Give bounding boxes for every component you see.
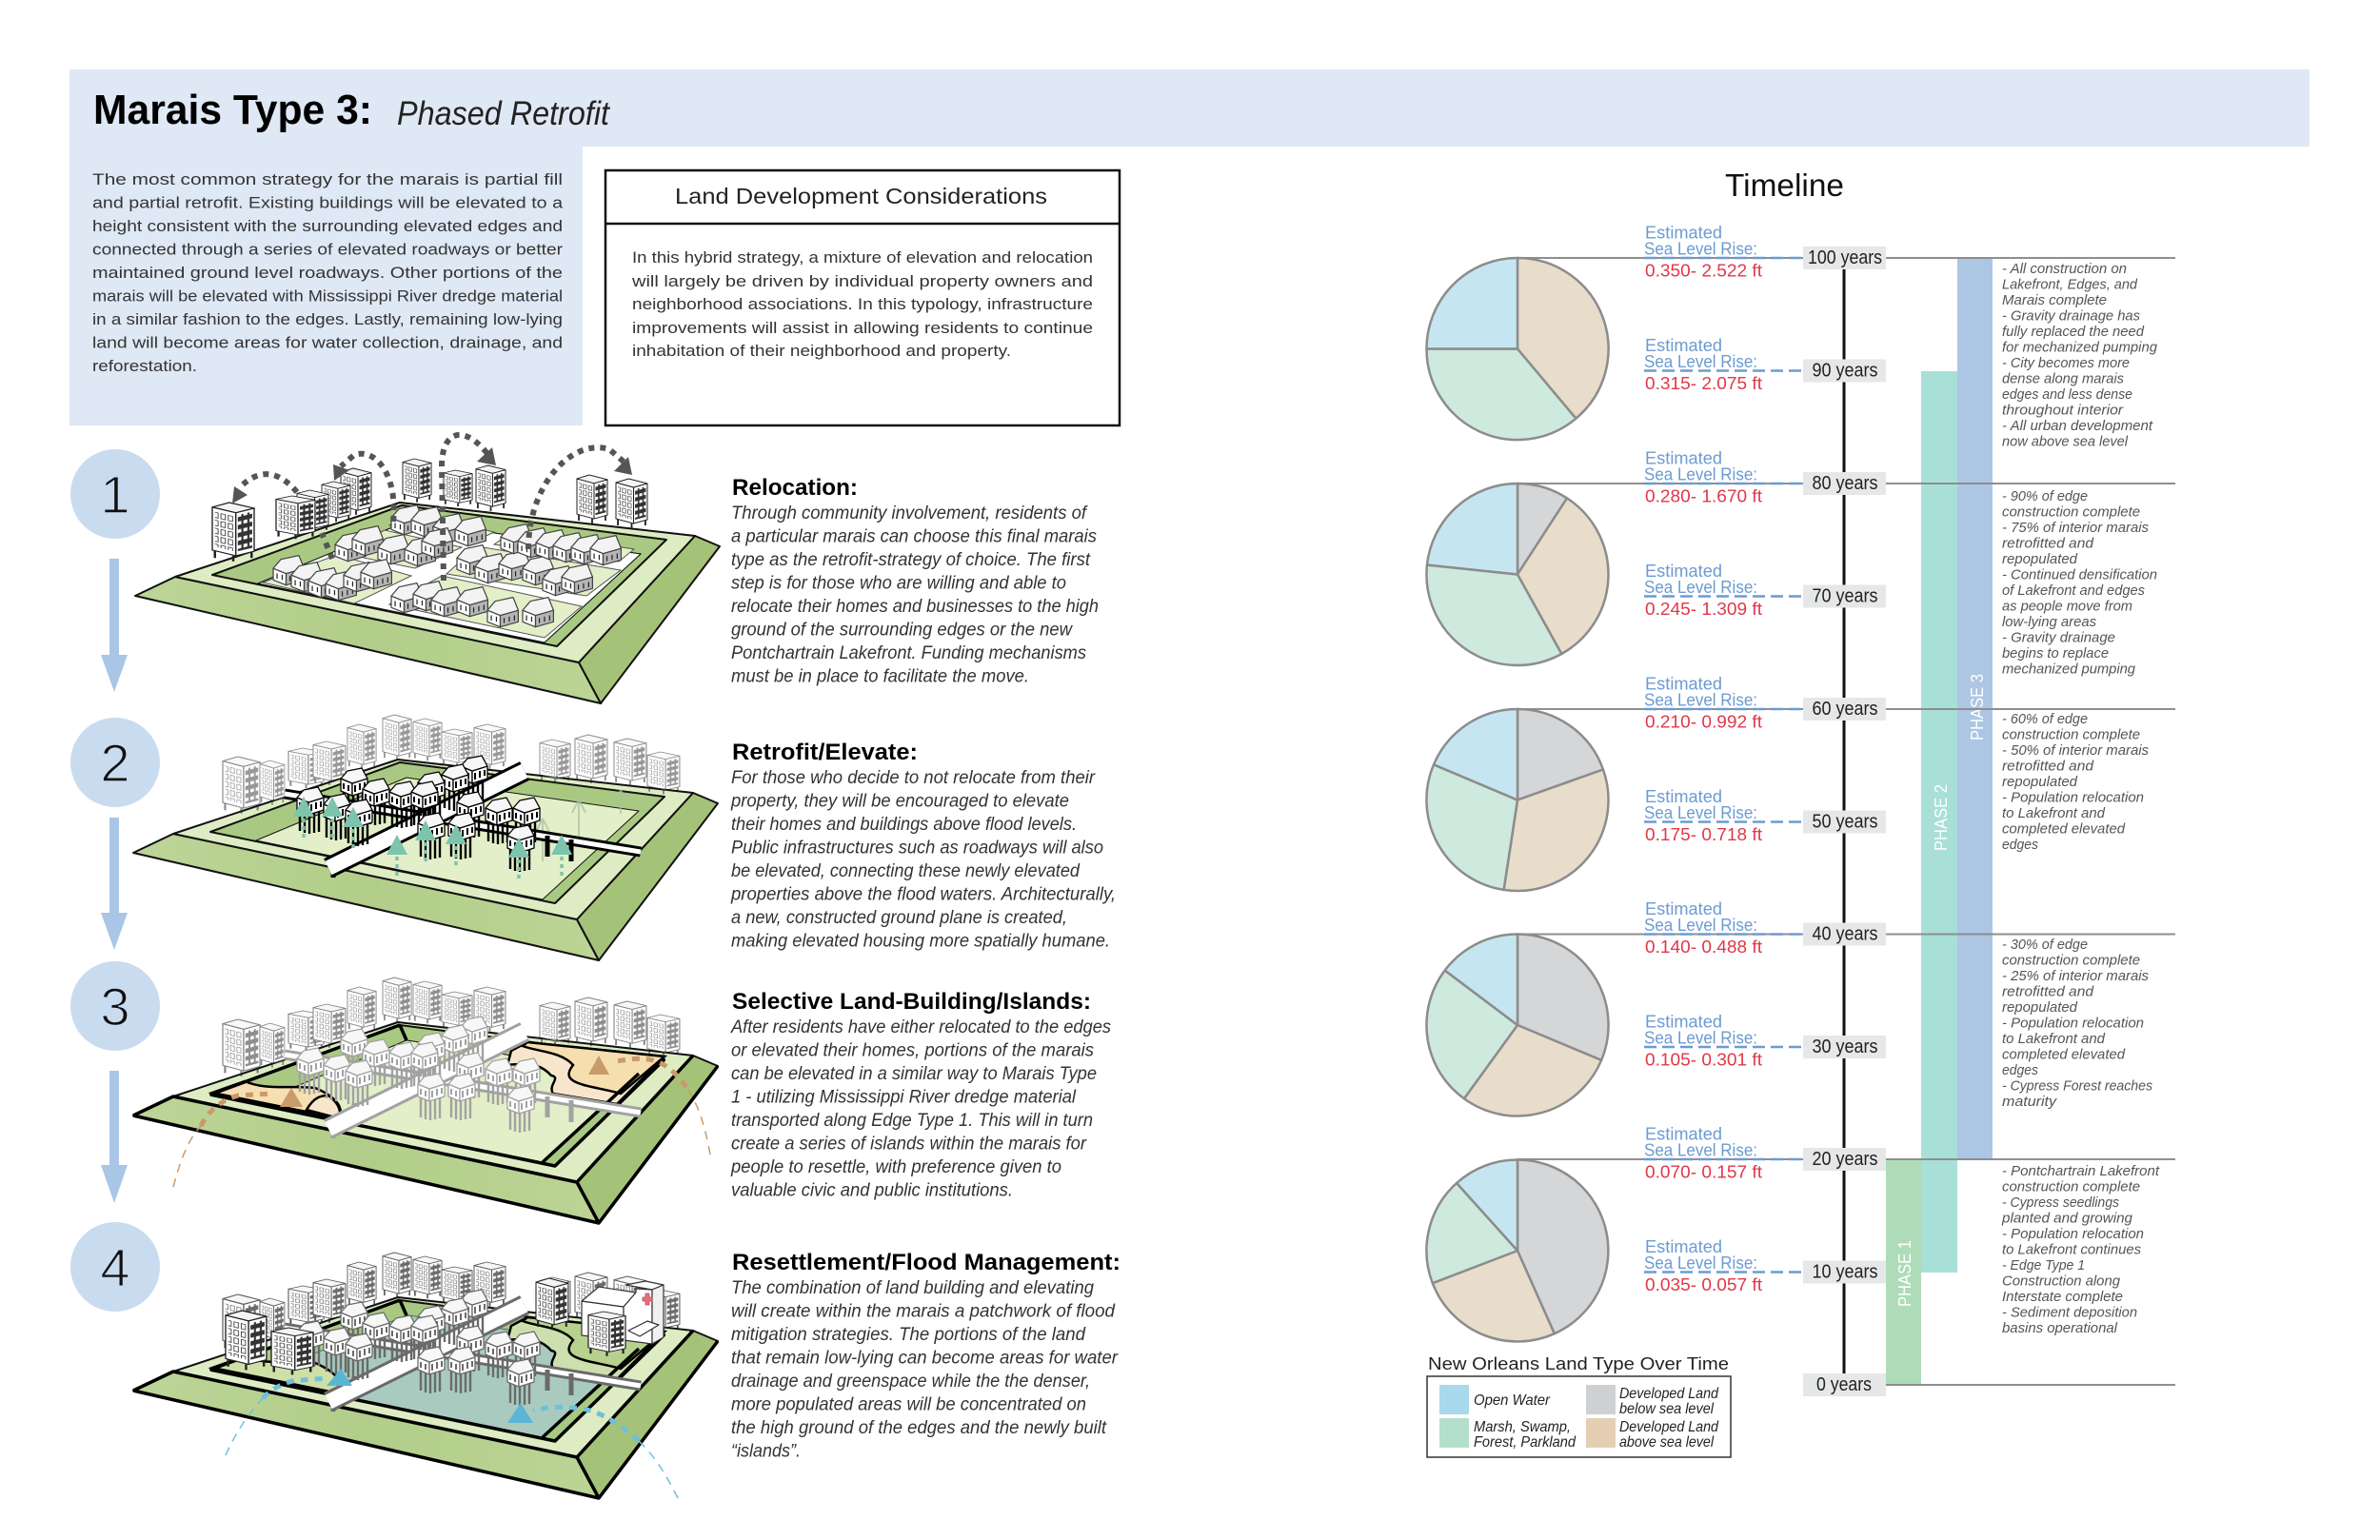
diagram 1: relocation	[135, 435, 720, 703]
arrow 2 to 3	[101, 818, 128, 950]
phase notes: 100 to 80 years	[2002, 261, 2158, 449]
timeline guide lines	[1517, 258, 2175, 1385]
phase notes: 80 to 60 years: - 90% of edge	[2002, 488, 2088, 504]
text: selective land building: or elevated their homes, portions of the marais	[731, 1041, 1094, 1060]
phase notes: 80 to 60 years: mechanized pumping	[2002, 661, 2136, 678]
phase bars: PHASE 1	[1895, 1240, 1914, 1307]
panel: intro text: in a similar fashion to the edges. Lastly, remaining low-lying	[92, 310, 563, 328]
phase notes: 40 to 20 years: - Population relocation	[2002, 1015, 2144, 1032]
year labels: 50 years	[1813, 811, 1877, 832]
phase notes: 20 to 0 years: - Cypress seedlings	[2002, 1194, 2119, 1211]
sea level rise labels: Sea Level Rise:	[1644, 1140, 1757, 1159]
phase notes: 80 to 60 years: begins to replace	[2002, 645, 2109, 661]
phase notes: 20 to 0 years: - Sediment deposition	[2002, 1304, 2137, 1321]
phase bars: PHASE 3	[1968, 674, 1987, 740]
text: selective land building: Selective Land-Building/Islands:	[732, 989, 1091, 1015]
phase notes: 100 to 80 years: for mechanized pumping	[2002, 339, 2158, 356]
phase notes: 60 to 40 years: - 50% of interior marais	[2002, 742, 2149, 759]
step number 3: 3	[100, 977, 130, 1037]
text: relocation: Relocation:	[732, 475, 858, 501]
text: resettlement and flood management: mitigation strategies. The portions of the land	[731, 1325, 1086, 1345]
sea level rise labels: 0.210- 0.992 ft	[1645, 712, 1762, 731]
phase notes: 60 to 40 years: - Population relocation	[2002, 790, 2144, 805]
phase notes: 20 to 0 years: to Lakefront continues	[2002, 1241, 2141, 1258]
text: retrofit and elevate: Retrofit/Elevate:	[732, 740, 918, 765]
phase bars	[1886, 258, 1993, 1385]
panel: land development considerations: Land Development Considerations	[675, 184, 1047, 208]
year labels: 20 years	[1813, 1149, 1877, 1170]
sea level rise labels: Estimated	[1645, 561, 1722, 581]
year labels: 60 years	[1813, 699, 1877, 720]
phase notes: 40 to 20 years: - 30% of edge	[2002, 937, 2088, 953]
text: retrofit and elevate: property, they will be encouraged to elevate	[730, 792, 1069, 811]
panel: intro text	[69, 147, 583, 425]
year labels: 40 years	[1813, 923, 1877, 944]
text: retrofit and elevate: making elevated housing more spatially humane.	[731, 931, 1110, 952]
text: relocation	[731, 475, 1099, 687]
year labels: 80 years	[1813, 473, 1877, 494]
sea level rise labels: Estimated	[1645, 1236, 1722, 1256]
phase notes: 80 to 60 years: - Continued densification	[2002, 567, 2157, 582]
panel: intro text: and partial retrofit. Existing buildings will be elevated to a	[92, 194, 564, 211]
phase notes: 80 to 60 years: retrofitted and	[2002, 535, 2094, 552]
text: resettlement and flood management: “islands”.	[731, 1441, 801, 1462]
sea level rise labels: Estimated	[1645, 447, 1722, 468]
phase notes: 100 to 80 years: edges and less dense	[2002, 386, 2132, 403]
phase notes: 100 to 80 years: Lakefront, Edges, and	[2002, 276, 2138, 293]
pie chart: 80 to 60 years	[1426, 484, 1608, 665]
step number 2: 2	[100, 733, 130, 793]
panel: intro text: maintained ground level roadways. Other portions of the	[92, 264, 563, 282]
phase notes: 60 to 40 years: - 60% of edge	[2002, 711, 2088, 727]
phase notes: 40 to 20 years: to Lakefront and	[2002, 1031, 2106, 1047]
text: relocation: step is for those who are willing and able to	[731, 573, 1066, 594]
step number 3	[70, 961, 160, 1051]
sea level rise labels: Sea Level Rise:	[1644, 802, 1757, 822]
sea level rise labels: 0.035- 0.057 ft	[1645, 1274, 1762, 1294]
phase notes: 20 to 0 years: construction complete	[2002, 1178, 2140, 1195]
text: relocation: Pontchartrain Lakefront. Funding mechanisms	[731, 643, 1086, 663]
phase notes: 20 to 0 years: - Population relocation	[2002, 1226, 2144, 1242]
text: retrofit and elevate: Public infrastructures such as roadways will also	[731, 838, 1103, 859]
pie chart: 40 to 20 years	[1426, 935, 1609, 1116]
phase notes: 40 to 20 years	[2002, 937, 2152, 1110]
year labels: 90 years	[1813, 360, 1877, 381]
legend: Developed Land	[1619, 1386, 1719, 1402]
phase notes: 80 to 60 years: repopulated	[2002, 551, 2078, 567]
text: retrofit and elevate: a new, constructed ground plane is created,	[731, 908, 1067, 928]
phase notes: 100 to 80 years: - City becomes more	[2002, 355, 2130, 371]
phase notes: 80 to 60 years: - Gravity drainage	[2002, 630, 2115, 645]
panel: land development considerations: inhabitation of their neighborhood and property.	[632, 342, 1011, 360]
text: resettlement and flood management: will create within the marais a patchwork of flood	[731, 1302, 1116, 1321]
legend: Developed Land	[1619, 1419, 1719, 1435]
phase notes: 80 to 60 years: low-lying areas	[2002, 614, 2096, 630]
sea level rise labels: Sea Level Rise:	[1644, 464, 1757, 484]
legend	[1427, 1354, 1731, 1457]
sea level rise labels: Sea Level Rise:	[1644, 577, 1757, 597]
sea level rise labels: Estimated	[1645, 223, 1722, 242]
sea level rise labels: Estimated	[1645, 1123, 1722, 1144]
sea level rise labels: 0.315- 2.075 ft	[1645, 373, 1762, 393]
step number 4	[70, 1222, 160, 1312]
legend: Forest, Parkland	[1474, 1434, 1577, 1451]
year labels	[1803, 247, 1886, 1396]
panel: intro text: height consistent with the surrounding elevated edges and	[92, 217, 563, 235]
arrow 1 to 2	[101, 559, 128, 692]
year labels: 70 years	[1813, 586, 1877, 607]
phase notes: 80 to 60 years: as people move from	[2002, 598, 2132, 615]
timeline axis	[1843, 258, 1845, 1385]
phase notes: 100 to 80 years: - Gravity drainage has	[2002, 308, 2140, 324]
legend: Open Water	[1474, 1392, 1551, 1409]
phase notes: 40 to 20 years: - 25% of interior marais	[2002, 968, 2149, 984]
panel: land development considerations: improvements will assist in allowing residents to continue	[632, 319, 1093, 337]
pie chart: 60 to 40 years	[1426, 709, 1609, 891]
title: Marais Type 3:	[93, 87, 372, 133]
sea level rise labels: Sea Level Rise:	[1644, 689, 1757, 710]
phase notes: 20 to 0 years: planted and growing	[2001, 1211, 2133, 1226]
sea level rise labels: Estimated	[1645, 898, 1722, 918]
panel: land development considerations	[605, 170, 1120, 425]
sea level rise labels: Estimated	[1645, 674, 1722, 693]
sea level rise labels: Sea Level Rise:	[1644, 351, 1757, 371]
text: selective land building: people to resettle, with preference given to	[730, 1157, 1061, 1177]
phase notes: 100 to 80 years: fully replaced the need	[2002, 324, 2145, 340]
phase notes: 20 to 0 years	[2001, 1163, 2160, 1336]
text: resettlement and flood management: more populated areas will be concentrated on	[731, 1395, 1086, 1414]
panel: intro text: reforestation.	[92, 357, 197, 375]
phase notes: 40 to 20 years: maturity	[2002, 1094, 2058, 1110]
sea level rise labels: 0.105- 0.301 ft	[1645, 1049, 1762, 1070]
sea level rise labels	[1644, 223, 1803, 1294]
year labels: 10 years	[1813, 1262, 1877, 1283]
text: resettlement and flood management: drainage and greenspace while the the denser,	[731, 1372, 1090, 1392]
pie chart: 100 to 80 years	[1426, 258, 1609, 440]
phase notes: 60 to 40 years: repopulated	[2002, 774, 2078, 790]
pie chart: 20 to 0 years	[1426, 1159, 1608, 1341]
legend: New Orleans Land Type Over Time	[1428, 1354, 1729, 1373]
sea level rise labels: Sea Level Rise:	[1644, 915, 1757, 935]
sea level rise labels: 0.245- 1.309 ft	[1645, 599, 1762, 619]
phase notes: 60 to 40 years: retrofitted and	[2002, 758, 2094, 775]
text: relocation: Through community involvement, residents of	[731, 503, 1088, 523]
legend: above sea level	[1619, 1434, 1714, 1451]
sea level rise labels: 0.140- 0.488 ft	[1645, 937, 1762, 957]
text: retrofit and elevate: be elevated, connecting these newly elevated	[731, 861, 1081, 881]
text: resettlement and flood management: The combination of land building and elevating	[731, 1278, 1094, 1298]
subtitle: Phased Retrofit	[397, 95, 610, 132]
phase notes: 100 to 80 years: - All construction on	[2002, 261, 2127, 277]
timeline heading: Timeline	[1725, 168, 1844, 203]
phase notes: 20 to 0 years: Interstate complete	[2002, 1289, 2123, 1305]
icon: hospital	[582, 1281, 664, 1344]
phase notes: 80 to 60 years: construction complete	[2002, 504, 2140, 520]
phase notes: 80 to 60 years: - 75% of interior marais	[2002, 520, 2149, 536]
step number 4: 4	[100, 1237, 130, 1297]
phase notes: 60 to 40 years	[2002, 711, 2149, 853]
text: retrofit and elevate	[730, 740, 1116, 952]
sea level rise labels: 0.350- 2.522 ft	[1645, 261, 1762, 280]
text: selective land building: valuable civic and public institutions.	[731, 1180, 1013, 1201]
phase notes: 40 to 20 years: repopulated	[2002, 999, 2078, 1016]
phase notes: 100 to 80 years: throughout interior	[2002, 402, 2124, 419]
year labels: 30 years	[1813, 1037, 1877, 1057]
phase notes: 80 to 60 years: of Lakefront and edges	[2002, 582, 2145, 599]
text: selective land building: can be elevated in a similar way to Marais Type	[731, 1064, 1097, 1084]
sea level rise labels: Sea Level Rise:	[1644, 1028, 1757, 1047]
phase notes: 40 to 20 years: - Cypress Forest reaches	[2002, 1077, 2152, 1095]
text: resettlement and flood management: that remain low-lying can become areas for water	[731, 1348, 1119, 1369]
phase notes: 40 to 20 years: retrofitted and	[2002, 984, 2094, 999]
step number 2	[70, 718, 160, 807]
phase bars: PHASE 2	[1932, 784, 1951, 851]
text: relocation: a particular marais can choose this final marais	[731, 527, 1097, 546]
sea level rise labels: 0.175- 0.718 ft	[1645, 824, 1762, 844]
header banner	[69, 69, 2310, 147]
phase notes: 60 to 40 years: to Lakefront and	[2002, 805, 2106, 821]
text: resettlement and flood management: the high ground of the edges and the newly built	[731, 1418, 1107, 1438]
year labels: 100 years	[1808, 247, 1882, 268]
text: retrofit and elevate: properties above the flood waters. Architecturally,	[730, 885, 1116, 904]
phase notes: 100 to 80 years: dense along marais	[2002, 371, 2124, 386]
phase notes: 100 to 80 years: Marais complete	[2002, 292, 2107, 308]
sea level rise labels: Sea Level Rise:	[1644, 238, 1757, 259]
sea level rise labels: Estimated	[1645, 1011, 1722, 1032]
diagram 2: retrofit and elevate	[133, 715, 718, 960]
panel: intro text: connected through a series of elevated roadways or better	[92, 240, 563, 259]
phase notes: 40 to 20 years: construction complete	[2002, 952, 2140, 969]
panel: intro text: land will become areas for water collection, drainage, and	[92, 333, 563, 352]
text: resettlement and flood management: Resettlement/Flood Management:	[732, 1250, 1121, 1275]
text: selective land building	[730, 989, 1111, 1201]
step number 1	[70, 449, 160, 539]
phase notes: 20 to 0 years: - Edge Type 1	[2002, 1257, 2085, 1273]
phase notes: 60 to 40 years: edges	[2002, 837, 2038, 853]
year labels: 0 years	[1816, 1374, 1872, 1395]
panel: land development considerations: In this hybrid strategy, a mixture of elevation and relocation	[632, 248, 1093, 267]
text: resettlement and flood management	[731, 1250, 1121, 1462]
diagram 4: resettlement and flood management	[133, 1253, 718, 1498]
text: retrofit and elevate: their homes and buildings above flood levels.	[731, 815, 1077, 835]
phase notes: 20 to 0 years: Construction along	[2002, 1273, 2121, 1289]
legend: below sea level	[1619, 1401, 1714, 1417]
legend: Marsh, Swamp,	[1474, 1419, 1571, 1435]
sea level rise labels: 0.070- 0.157 ft	[1645, 1161, 1762, 1182]
panel: intro text: marais will be elevated with Mississippi River dredge material	[92, 287, 563, 305]
phase notes: 60 to 40 years: construction complete	[2002, 727, 2140, 742]
sea level rise labels: Estimated	[1645, 786, 1722, 806]
phase notes: 80 to 60 years	[2002, 488, 2157, 678]
arrow 3 to 4	[101, 1071, 128, 1203]
text: relocation: type as the retrofit-strategy of choice. The first	[731, 550, 1091, 570]
text: relocation: ground of the surrounding edges or the new	[731, 621, 1073, 640]
step number 1: 1	[100, 464, 130, 524]
sea level rise labels: Estimated	[1645, 335, 1722, 355]
diagram 3: selective land building and islands	[133, 977, 718, 1223]
phase notes: 40 to 20 years: edges	[2002, 1062, 2038, 1078]
text: selective land building: transported along Edge Type 1. This will in turn	[731, 1111, 1093, 1131]
sea level rise labels: 0.280- 1.670 ft	[1645, 485, 1762, 506]
phase notes: 20 to 0 years: - Pontchartrain Lakefront	[2002, 1163, 2160, 1179]
panel: land development considerations: will largely be driven by individual property owners and	[631, 272, 1093, 290]
text: selective land building: 1 - utilizing Mississippi River dredge material	[731, 1087, 1077, 1108]
phase notes: 100 to 80 years: - All urban development	[2002, 418, 2153, 434]
text: relocation: relocate their homes and businesses to the high	[731, 597, 1099, 617]
text: retrofit and elevate: For those who decide to not relocate from their	[731, 768, 1096, 788]
text: relocation: must be in place to facilitate the move.	[731, 666, 1029, 687]
phase notes: 60 to 40 years: completed elevated	[2002, 820, 2126, 838]
phase notes: 100 to 80 years: now above sea level	[2002, 434, 2129, 449]
text: selective land building: create a series of islands within the marais for	[731, 1135, 1087, 1154]
phase notes: 40 to 20 years: completed elevated	[2002, 1047, 2126, 1062]
panel: intro text: The most common strategy for the marais is partial fill	[92, 170, 563, 188]
sea level rise labels: Sea Level Rise:	[1644, 1253, 1757, 1273]
phase notes: 20 to 0 years: basins operational	[2002, 1320, 2118, 1336]
text: selective land building: After residents have either relocated to the edges	[730, 1017, 1111, 1037]
panel: land development considerations: neighborhood associations. In this typology, infrastructure	[632, 295, 1093, 313]
